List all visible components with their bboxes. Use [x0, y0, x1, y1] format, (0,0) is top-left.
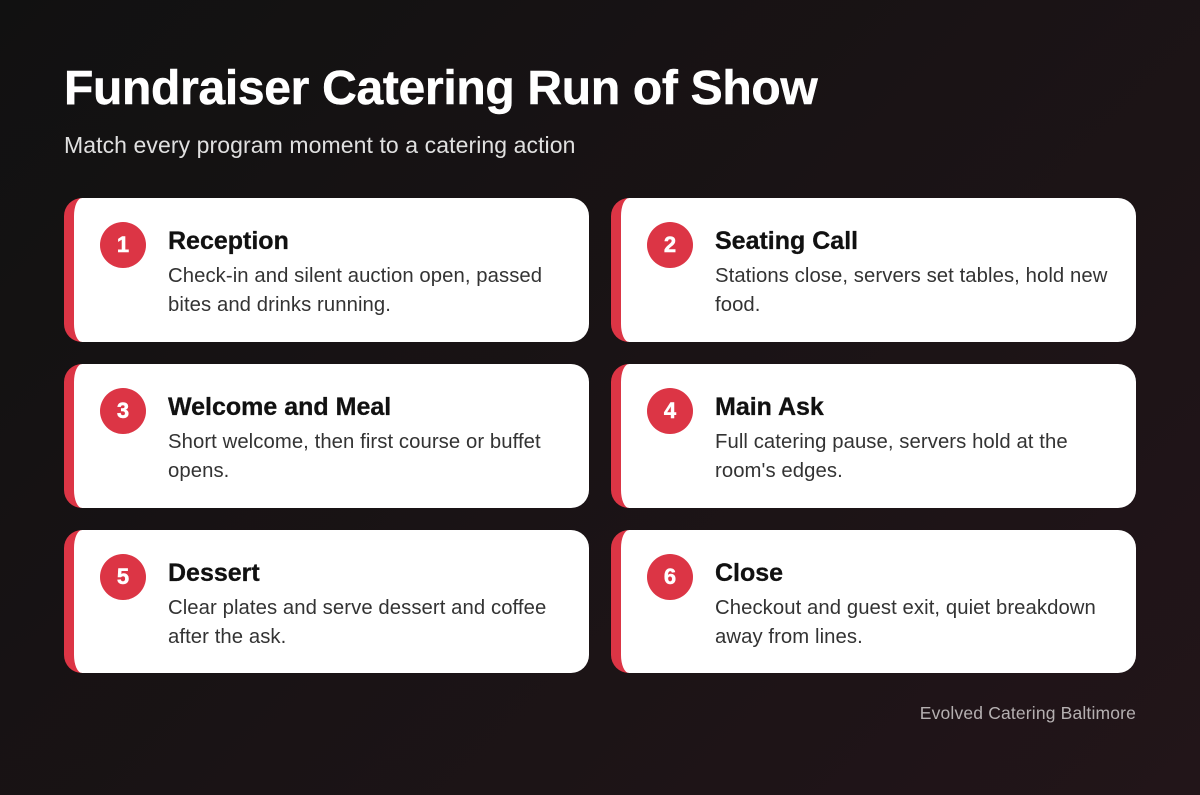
step 5 description	[168, 597, 546, 648]
step 2 heading: Seating Call	[715, 227, 858, 255]
step number 4	[647, 388, 693, 434]
subtitle: Match every program moment to a catering action	[64, 132, 576, 158]
step 6 heading: Close	[715, 559, 783, 587]
step 3 description	[168, 431, 541, 482]
step number 3: 3	[117, 398, 129, 423]
step number 6	[647, 554, 693, 600]
footer credit: Evolved Catering Baltimore	[920, 703, 1136, 723]
step 6 description: away from lines.	[715, 626, 863, 648]
step 5 description: after the ask.	[168, 626, 286, 648]
panel: step 2 Seating Call	[611, 198, 1136, 342]
step 6 description: Checkout and guest exit, quiet breakdown	[715, 597, 1096, 619]
step number 3	[100, 388, 146, 434]
step 1 description: bites and drinks running.	[168, 294, 391, 316]
step 5 heading: Dessert	[168, 559, 260, 587]
step 1 description: Check-in and silent auction open, passed	[168, 265, 542, 287]
step number 5	[100, 554, 146, 600]
step 3 heading: Welcome and Meal	[168, 393, 391, 421]
panel: step 4 Main Ask	[611, 364, 1136, 508]
step number 1	[100, 222, 146, 268]
step 3 description: Short welcome, then first course or buffet	[168, 431, 541, 453]
step 4 description	[715, 431, 1068, 482]
step 2 description: Stations close, servers set tables, hold new	[715, 265, 1107, 287]
step 6 description	[715, 597, 1096, 648]
step number 2	[647, 222, 693, 268]
panel: step 1 Reception	[64, 198, 589, 342]
panel: step 3 Welcome and Meal	[64, 364, 589, 508]
step number 1: 1	[117, 232, 129, 257]
step number 5: 5	[117, 564, 129, 589]
panel: step 5 Dessert	[64, 530, 589, 673]
step 4 description: room's edges.	[715, 460, 843, 482]
step 4 description: Full catering pause, servers hold at the	[715, 431, 1068, 453]
step 1 heading: Reception	[168, 227, 289, 255]
title: Fundraiser Catering Run of Show	[64, 62, 817, 115]
step 1 description	[168, 265, 542, 316]
step number 2: 2	[664, 232, 676, 257]
step number 6: 6	[664, 564, 676, 589]
step 4 heading: Main Ask	[715, 393, 824, 421]
panel: step 6 Close	[611, 530, 1136, 673]
step 2 description	[715, 265, 1108, 316]
step number 4: 4	[664, 398, 676, 423]
step 3 description: opens.	[168, 460, 229, 482]
step 5 description: Clear plates and serve dessert and coffee	[168, 597, 546, 619]
step 2 description: food.	[715, 294, 761, 316]
